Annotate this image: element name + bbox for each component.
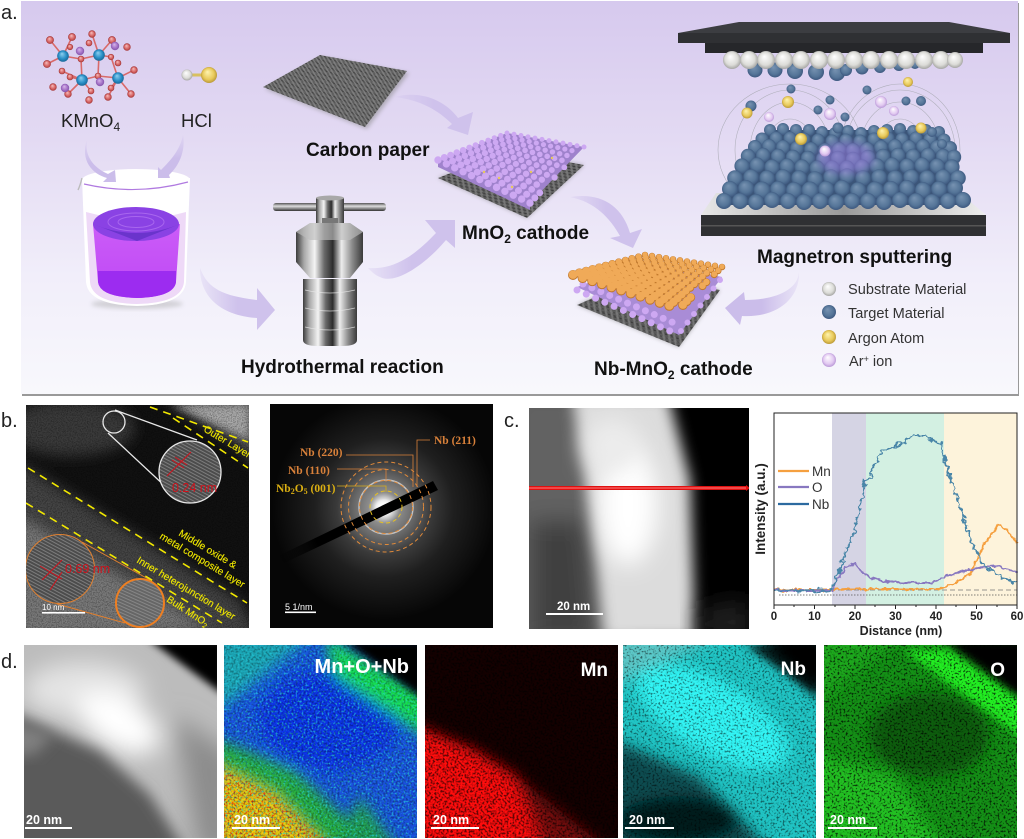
legend item: Ar+ ion: ion xyxy=(869,354,892,370)
icon: carbon paper sheet xyxy=(263,55,409,129)
x-axis tick labels: 40 xyxy=(930,611,942,623)
label: magnetron sputtering: Magnetron sputtering xyxy=(757,247,952,268)
icon: HCl molecule xyxy=(182,67,217,83)
beam stop xyxy=(297,481,438,554)
panel b: SAED diffraction pattern: O xyxy=(295,483,304,495)
legend item: Ar+ ion: + xyxy=(864,354,869,364)
label: HCl: HCl xyxy=(181,110,212,131)
chart: EDS line profile xyxy=(753,413,1023,638)
layer labels xyxy=(134,424,253,630)
panel label d: d. xyxy=(1,651,18,673)
legend item: target material: Target Material xyxy=(848,306,945,322)
x-axis tick labels: 0 xyxy=(771,611,777,623)
series: O xyxy=(774,563,1017,590)
label: MnO2 cathode: MnO xyxy=(462,223,504,244)
layer labels: metal composite layer xyxy=(157,531,247,591)
lattice inset 0.69 nm: 0.69 nm xyxy=(65,562,110,576)
arrow: carbon paper to MnO2 xyxy=(395,95,473,135)
x-axis title: Distance (nm) xyxy=(860,624,942,638)
scale bar: 20 nm xyxy=(830,813,866,827)
panel b: SAED diffraction pattern xyxy=(270,404,493,628)
element label: O xyxy=(990,660,1005,681)
top plate xyxy=(678,22,1010,53)
icon: beaker with purple solution xyxy=(78,169,190,309)
layer labels: Outer Layer xyxy=(201,424,253,461)
ring callouts xyxy=(337,440,430,492)
scale bar 20 nm: 20 nm xyxy=(557,601,590,613)
scale bar: 20 nm xyxy=(629,813,665,827)
scale bar: 20 nm xyxy=(26,813,62,827)
panel a: synthesis background xyxy=(21,1,1019,396)
y-axis title: Intensity (a.u.) xyxy=(753,463,768,555)
scale bar 20 nm xyxy=(546,601,603,615)
panel b: SAED diffraction pattern: Nb (220) xyxy=(300,447,343,459)
icon: MnO2 cathode stack xyxy=(438,133,584,218)
legend item: argon atom: Argon Atom xyxy=(848,331,924,347)
x-axis tick labels: 30 xyxy=(889,611,902,623)
label: hydrothermal reaction: Hydrothermal reaction xyxy=(241,357,444,378)
chart legend: Nb xyxy=(812,497,829,512)
baseline references xyxy=(774,589,1017,591)
scale bar 5 1/nm: 5 1/nm xyxy=(285,602,313,612)
arrow: KMnO4 to beaker xyxy=(85,140,116,182)
series: Mn xyxy=(774,525,1017,590)
deposited target atoms xyxy=(748,59,920,81)
x-axis tick labels xyxy=(771,611,1023,623)
lattice inset 0.24 nm: 0.24 nm xyxy=(172,481,217,495)
layer labels: Middle oxide & xyxy=(176,528,239,572)
x-axis tick labels: 60 xyxy=(1011,611,1023,623)
layer labels: 2 xyxy=(201,622,208,630)
arrow: HCl to beaker xyxy=(158,135,184,178)
layer boundary dashed lines xyxy=(26,407,248,623)
label: Nb-MnO2 cathode: Nb-MnO xyxy=(594,359,668,380)
element label: Mn xyxy=(581,660,608,681)
icon: Nb-MnO2 cathode stack xyxy=(573,255,722,347)
label: carbon paper: Carbon paper xyxy=(306,140,430,161)
scale bar 10 nm xyxy=(42,603,85,614)
panel label a: a. xyxy=(1,2,18,24)
arrow: MnO2 to Nb-MnO2 xyxy=(570,196,642,248)
plasma glow xyxy=(818,142,874,174)
label: MnO2 cathode: cathode xyxy=(511,223,589,244)
lattice inset 0.24 nm xyxy=(103,410,221,503)
label: Nb-MnO2 cathode: cathode xyxy=(675,359,753,380)
scale bar xyxy=(232,813,280,829)
panel d: Mn elemental map xyxy=(410,645,618,839)
scale bar: 20 nm xyxy=(433,813,469,827)
layer labels: Bulk MnO xyxy=(164,594,207,627)
layer labels: Inner heterojunction layer xyxy=(134,555,237,623)
chart legend xyxy=(778,464,831,512)
panel b: SAED diffraction pattern: Nb (211) xyxy=(434,435,476,447)
legend item: Ar+ ion xyxy=(822,353,892,370)
series: Nb xyxy=(774,435,1017,591)
axes frame and ticks xyxy=(774,413,1017,609)
scale bar 10 nm: 10 nm xyxy=(42,603,65,612)
x-axis tick labels: 50 xyxy=(970,611,983,623)
arrow: autoclave to MnO2 xyxy=(368,220,455,279)
panel d: Nb elemental map xyxy=(623,645,816,838)
bottom target stage xyxy=(701,193,986,236)
legend item: substrate material: Substrate Material xyxy=(848,282,966,298)
panel label c: c. xyxy=(504,410,520,432)
target atoms bed xyxy=(722,130,966,205)
scale bar xyxy=(828,813,877,829)
scale bar xyxy=(25,813,72,829)
region bands xyxy=(832,413,1017,605)
panel b: SAED diffraction pattern: (001) xyxy=(308,483,336,495)
panel b: SAED diffraction pattern: Nb xyxy=(276,483,291,495)
label: MnO2 cathode: 2 xyxy=(504,232,511,246)
panel b: SAED diffraction pattern: 5 xyxy=(304,487,308,496)
arrow: magnetron sputtering to Nb-MnO2 xyxy=(725,272,799,325)
x-axis tick labels: 10 xyxy=(808,611,821,623)
panel label b: b. xyxy=(1,410,18,432)
label: KMnO4: KMnO xyxy=(61,110,113,131)
legend xyxy=(822,282,966,370)
diffraction rings xyxy=(341,462,431,552)
panel d: O elemental map xyxy=(824,645,1017,838)
label: Nb-MnO2 cathode: 2 xyxy=(668,368,675,382)
magnetic field lines xyxy=(718,84,960,216)
sputtered particles xyxy=(742,77,947,156)
substrate atoms row xyxy=(723,51,963,69)
chart legend: Mn xyxy=(812,464,831,479)
scale bar xyxy=(431,813,479,829)
illustration: magnetron sputtering chamber xyxy=(678,22,1010,236)
scale bar: 20 nm xyxy=(234,813,270,827)
x-axis tick labels: 20 xyxy=(849,611,861,623)
panel b: SAED diffraction pattern: Nb (110) xyxy=(288,465,330,477)
lattice inset 0.69 nm xyxy=(26,534,164,627)
panel b: SAED diffraction pattern: 2 xyxy=(291,487,295,496)
chart legend: O xyxy=(812,480,823,495)
legend item: Ar+ ion: Ar xyxy=(849,354,864,370)
panel d: STEM image xyxy=(24,645,217,838)
panel c: STEM image with line scan xyxy=(529,408,749,629)
line scan arrow xyxy=(529,485,750,491)
icon: hydrothermal autoclave xyxy=(273,196,386,346)
element label: Nb xyxy=(781,659,806,680)
panel d: Mn+O+Nb composite map xyxy=(224,645,417,838)
icon: KMnO4 molecule xyxy=(43,31,137,103)
scale bar xyxy=(625,813,674,829)
panel b: HRTEM image xyxy=(26,405,249,628)
arrow: beaker to autoclave xyxy=(200,268,275,330)
label: KMnO4: 4 xyxy=(113,120,120,134)
element label: Mn+O+Nb xyxy=(315,656,409,678)
